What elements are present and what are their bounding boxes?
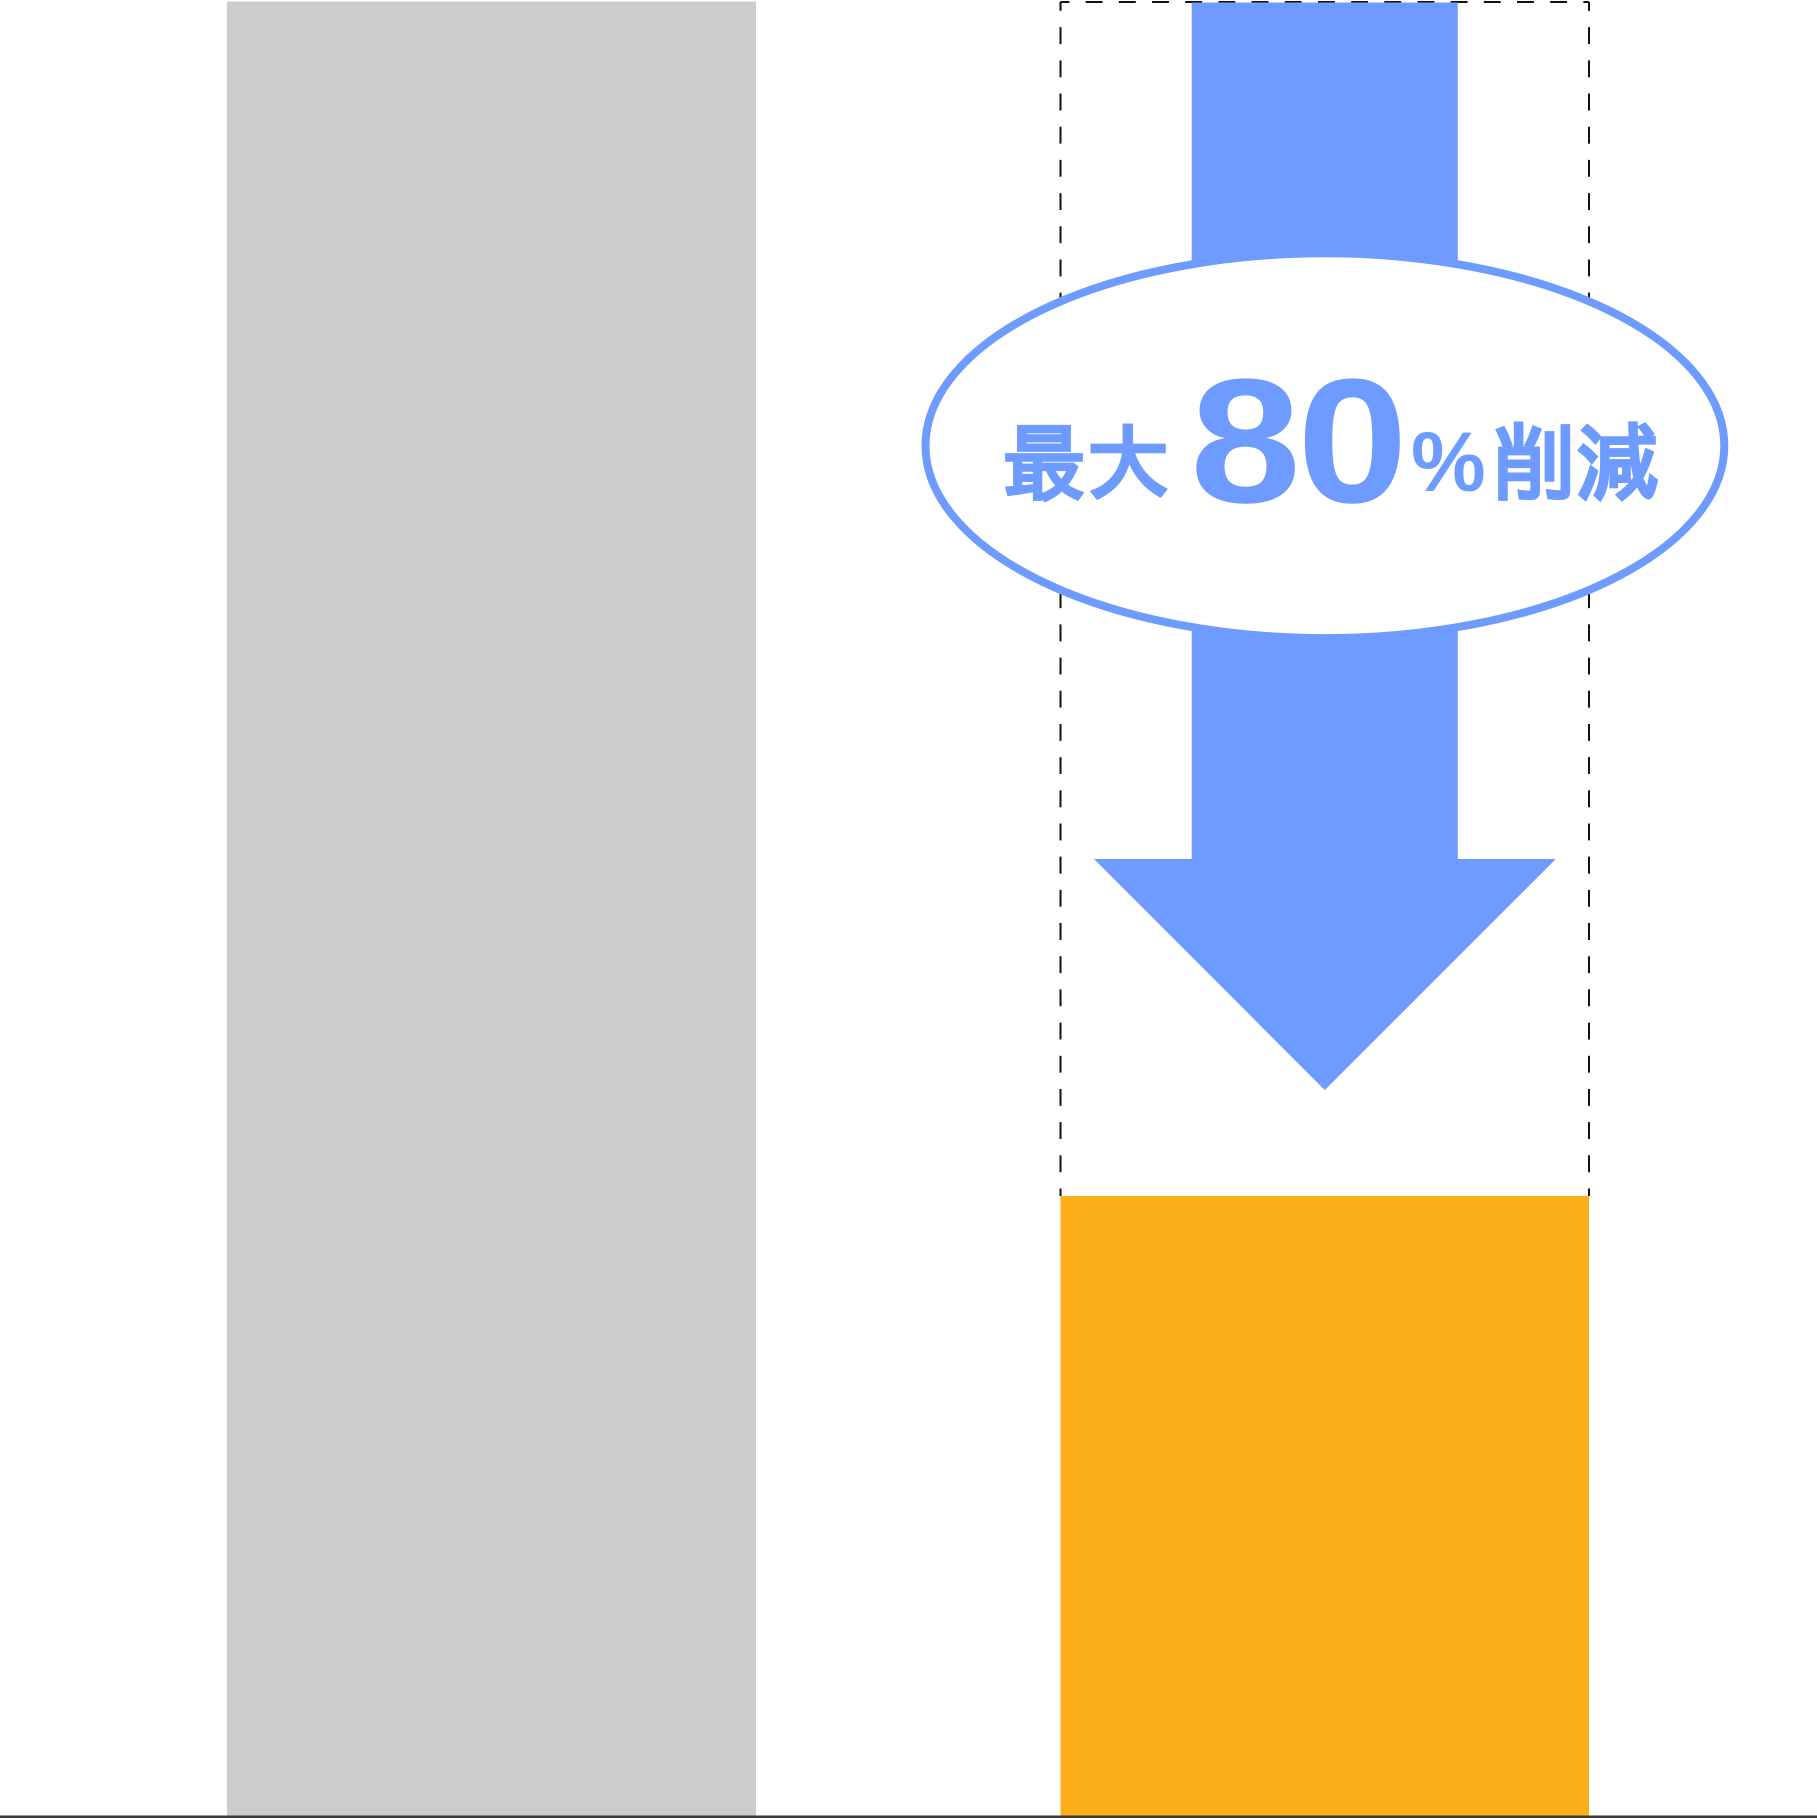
callout text: % xyxy=(1411,415,1486,509)
baseline axis xyxy=(0,1816,1817,1818)
bar: after (orange) xyxy=(1060,1196,1589,1816)
bar: before (gray) xyxy=(227,2,756,1816)
callout text: 8 xyxy=(1190,342,1301,540)
callout: maximum 80% reduction xyxy=(926,253,1724,638)
arrow: reduction pointing down xyxy=(1094,2,1556,1090)
dashed outline: reduced portion xyxy=(1060,2,1589,1196)
callout text xyxy=(1002,342,1660,540)
callout text: 削減 xyxy=(1492,420,1660,504)
callout text: 0 xyxy=(1297,342,1408,540)
callout text: 最大 xyxy=(1002,420,1170,504)
callout ellipse xyxy=(926,253,1724,638)
